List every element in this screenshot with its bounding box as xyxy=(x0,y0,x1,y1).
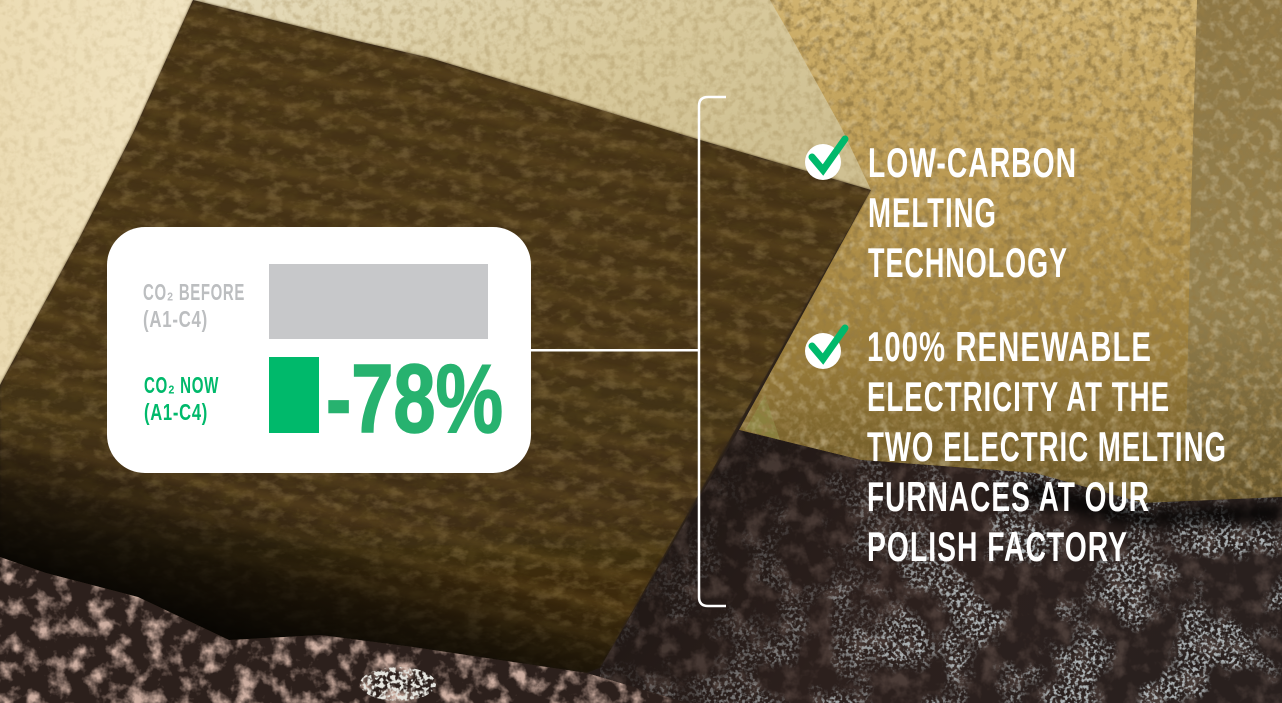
icon: check two xyxy=(805,328,845,369)
text: low-carbon melting technology: MELTING xyxy=(868,189,997,236)
text: low-carbon melting technology xyxy=(868,139,1077,286)
dark front face of main block xyxy=(0,0,880,698)
bracket xyxy=(699,97,726,606)
figure: minus 78 percent: -78% xyxy=(326,344,503,453)
label: CO2 before: CO₂ BEFORE xyxy=(143,279,245,305)
text: low-carbon melting technology: TECHNOLOGY xyxy=(868,239,1068,286)
label: CO2 now xyxy=(144,372,219,425)
label: CO2 before xyxy=(143,279,245,332)
panel: CO2 comparison card xyxy=(107,227,531,473)
rock left xyxy=(0,555,690,703)
text: renewable electricity: FURNACES AT OUR xyxy=(867,473,1150,520)
light left face of main block xyxy=(0,0,200,390)
bar: CO2 before xyxy=(269,264,488,339)
text: renewable electricity: 100% RENEWABLE xyxy=(867,323,1152,370)
text: low-carbon melting technology: LOW-CARBON xyxy=(868,139,1077,186)
text: renewable electricity xyxy=(867,323,1227,570)
text: renewable electricity: POLISH FACTORY xyxy=(867,523,1128,570)
rock right with lichen xyxy=(587,430,1282,703)
connector line xyxy=(530,349,698,352)
icon: check one xyxy=(805,139,845,180)
bar: CO2 now xyxy=(269,357,319,433)
label: CO2 before: (A1-C4) xyxy=(143,306,208,332)
top face of main block xyxy=(190,0,880,200)
label: CO2 now: (A1-C4) xyxy=(144,399,208,425)
right wool block xyxy=(730,0,1282,510)
label: CO2 now: CO₂ NOW xyxy=(144,372,219,398)
